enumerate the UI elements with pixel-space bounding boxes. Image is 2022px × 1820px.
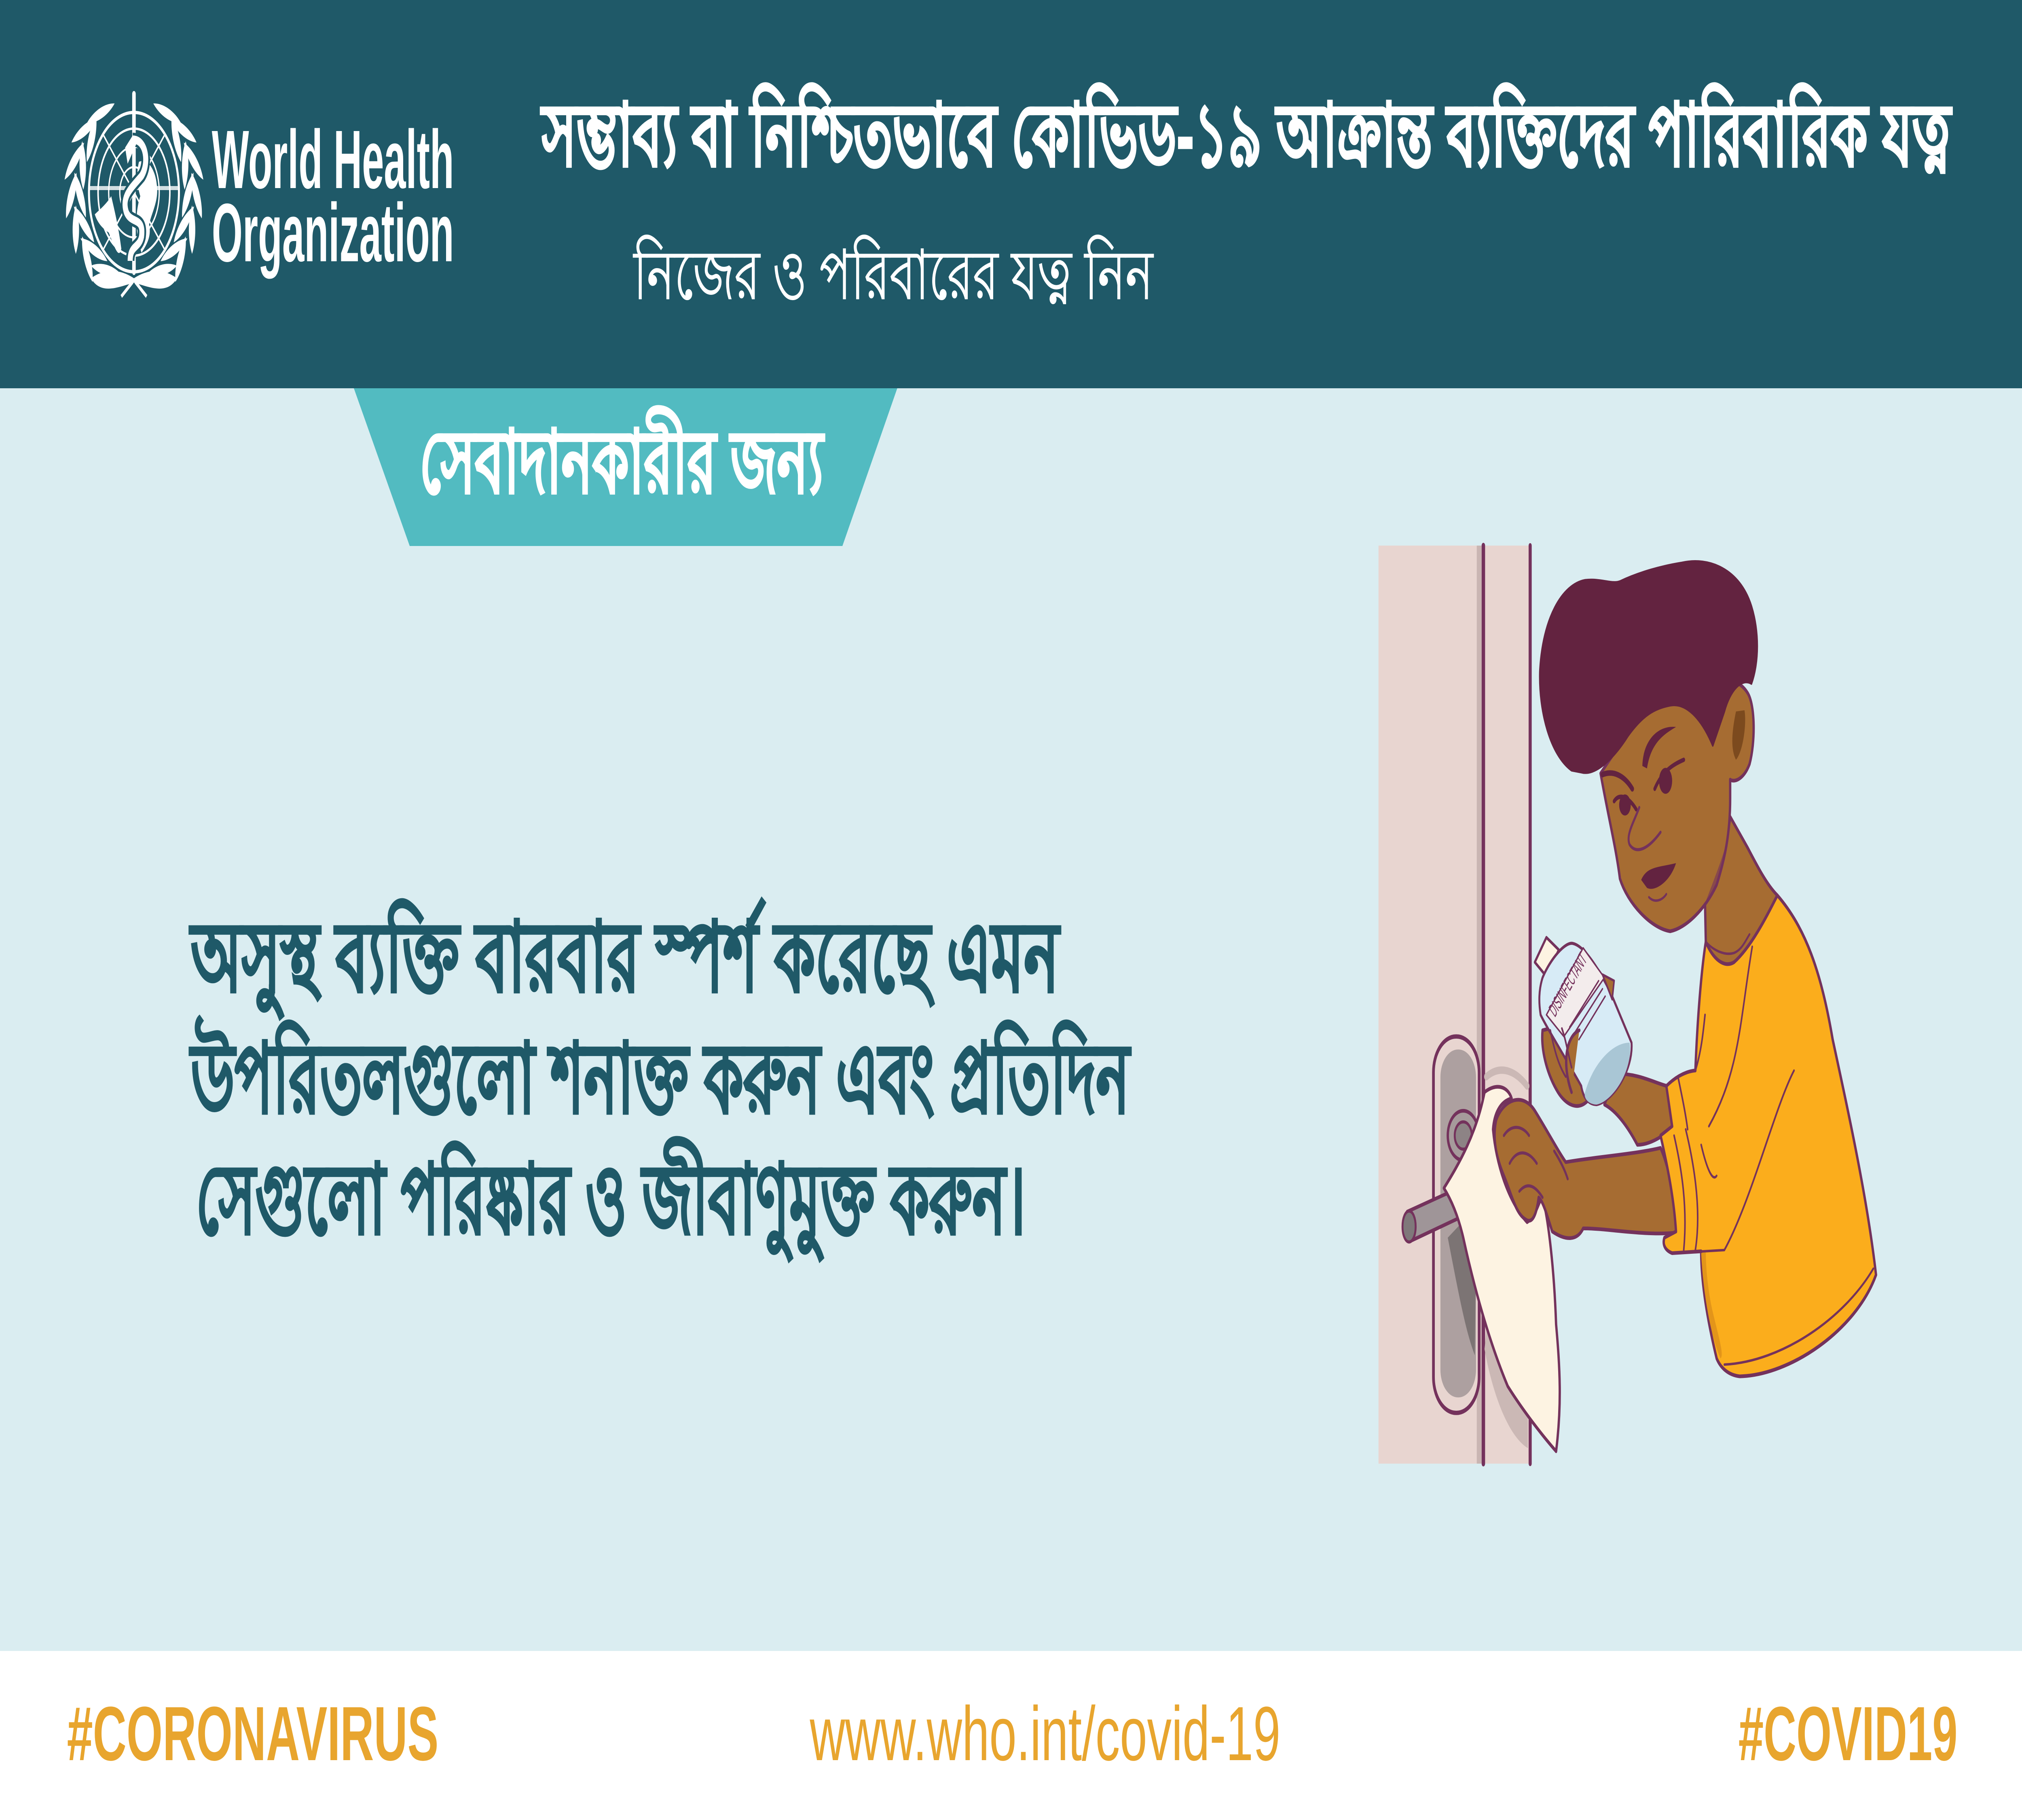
hashtag: covid19: #COVID19 bbox=[1739, 1691, 1958, 1777]
finger lines bbox=[1504, 1127, 1568, 1198]
head bbox=[1540, 561, 1757, 931]
logo wordmark: Organization bbox=[212, 186, 454, 279]
shirt bbox=[1660, 895, 1876, 1376]
panel: footer bbox=[0, 1651, 2022, 1820]
body text: সেগুলো পরিষ্কার ও জীবাণুমুক্ত করুন। bbox=[196, 1136, 1026, 1262]
body text: উপরিতলগুলো শনাক্ত করুন এবং প্রতিদিন bbox=[189, 1016, 1132, 1133]
title: সম্ভাব্য বা নিশ্চিতভাবে কোভিড-১৯ আক্রান্ত ব্যক্তিদের পারিবারিক যত্ন bbox=[540, 83, 1952, 184]
back arm and hand bbox=[1542, 1028, 1672, 1145]
disinfectant bottle bbox=[1535, 938, 1632, 1105]
icon: WHO emblem bbox=[62, 91, 206, 296]
neck bbox=[1705, 817, 1777, 964]
hashtag: coronavirus: #CORONAVIRUS bbox=[67, 1691, 438, 1777]
body text: অসুস্থ ব্যক্তি বারবার স্পর্শ করেছে এমন bbox=[189, 897, 1061, 1020]
illustration: person disinfecting door handle bbox=[1379, 546, 1876, 1464]
door bbox=[1379, 546, 1530, 1464]
logo wordmark bbox=[212, 113, 454, 279]
hair bbox=[1540, 561, 1757, 773]
body text bbox=[189, 897, 1132, 1262]
panel: header band bbox=[0, 0, 2022, 388]
website url: www.who.int/covid-19 bbox=[810, 1691, 1280, 1777]
logo wordmark: World Health bbox=[212, 113, 454, 206]
door handle bbox=[1402, 1037, 1479, 1413]
cloth bbox=[1444, 1087, 1560, 1451]
banner: for caregivers bbox=[354, 388, 897, 546]
facial features bbox=[1603, 727, 1684, 901]
banner: for caregivers: সেবাদানকারীর জন্য bbox=[420, 406, 825, 511]
disinfectant bottle: DISINFECTANT bbox=[1546, 948, 1590, 1021]
front arm and hand bbox=[1495, 1100, 1676, 1238]
subtitle: নিজের ও পরিবারের যত্ন নিন bbox=[633, 235, 1154, 314]
